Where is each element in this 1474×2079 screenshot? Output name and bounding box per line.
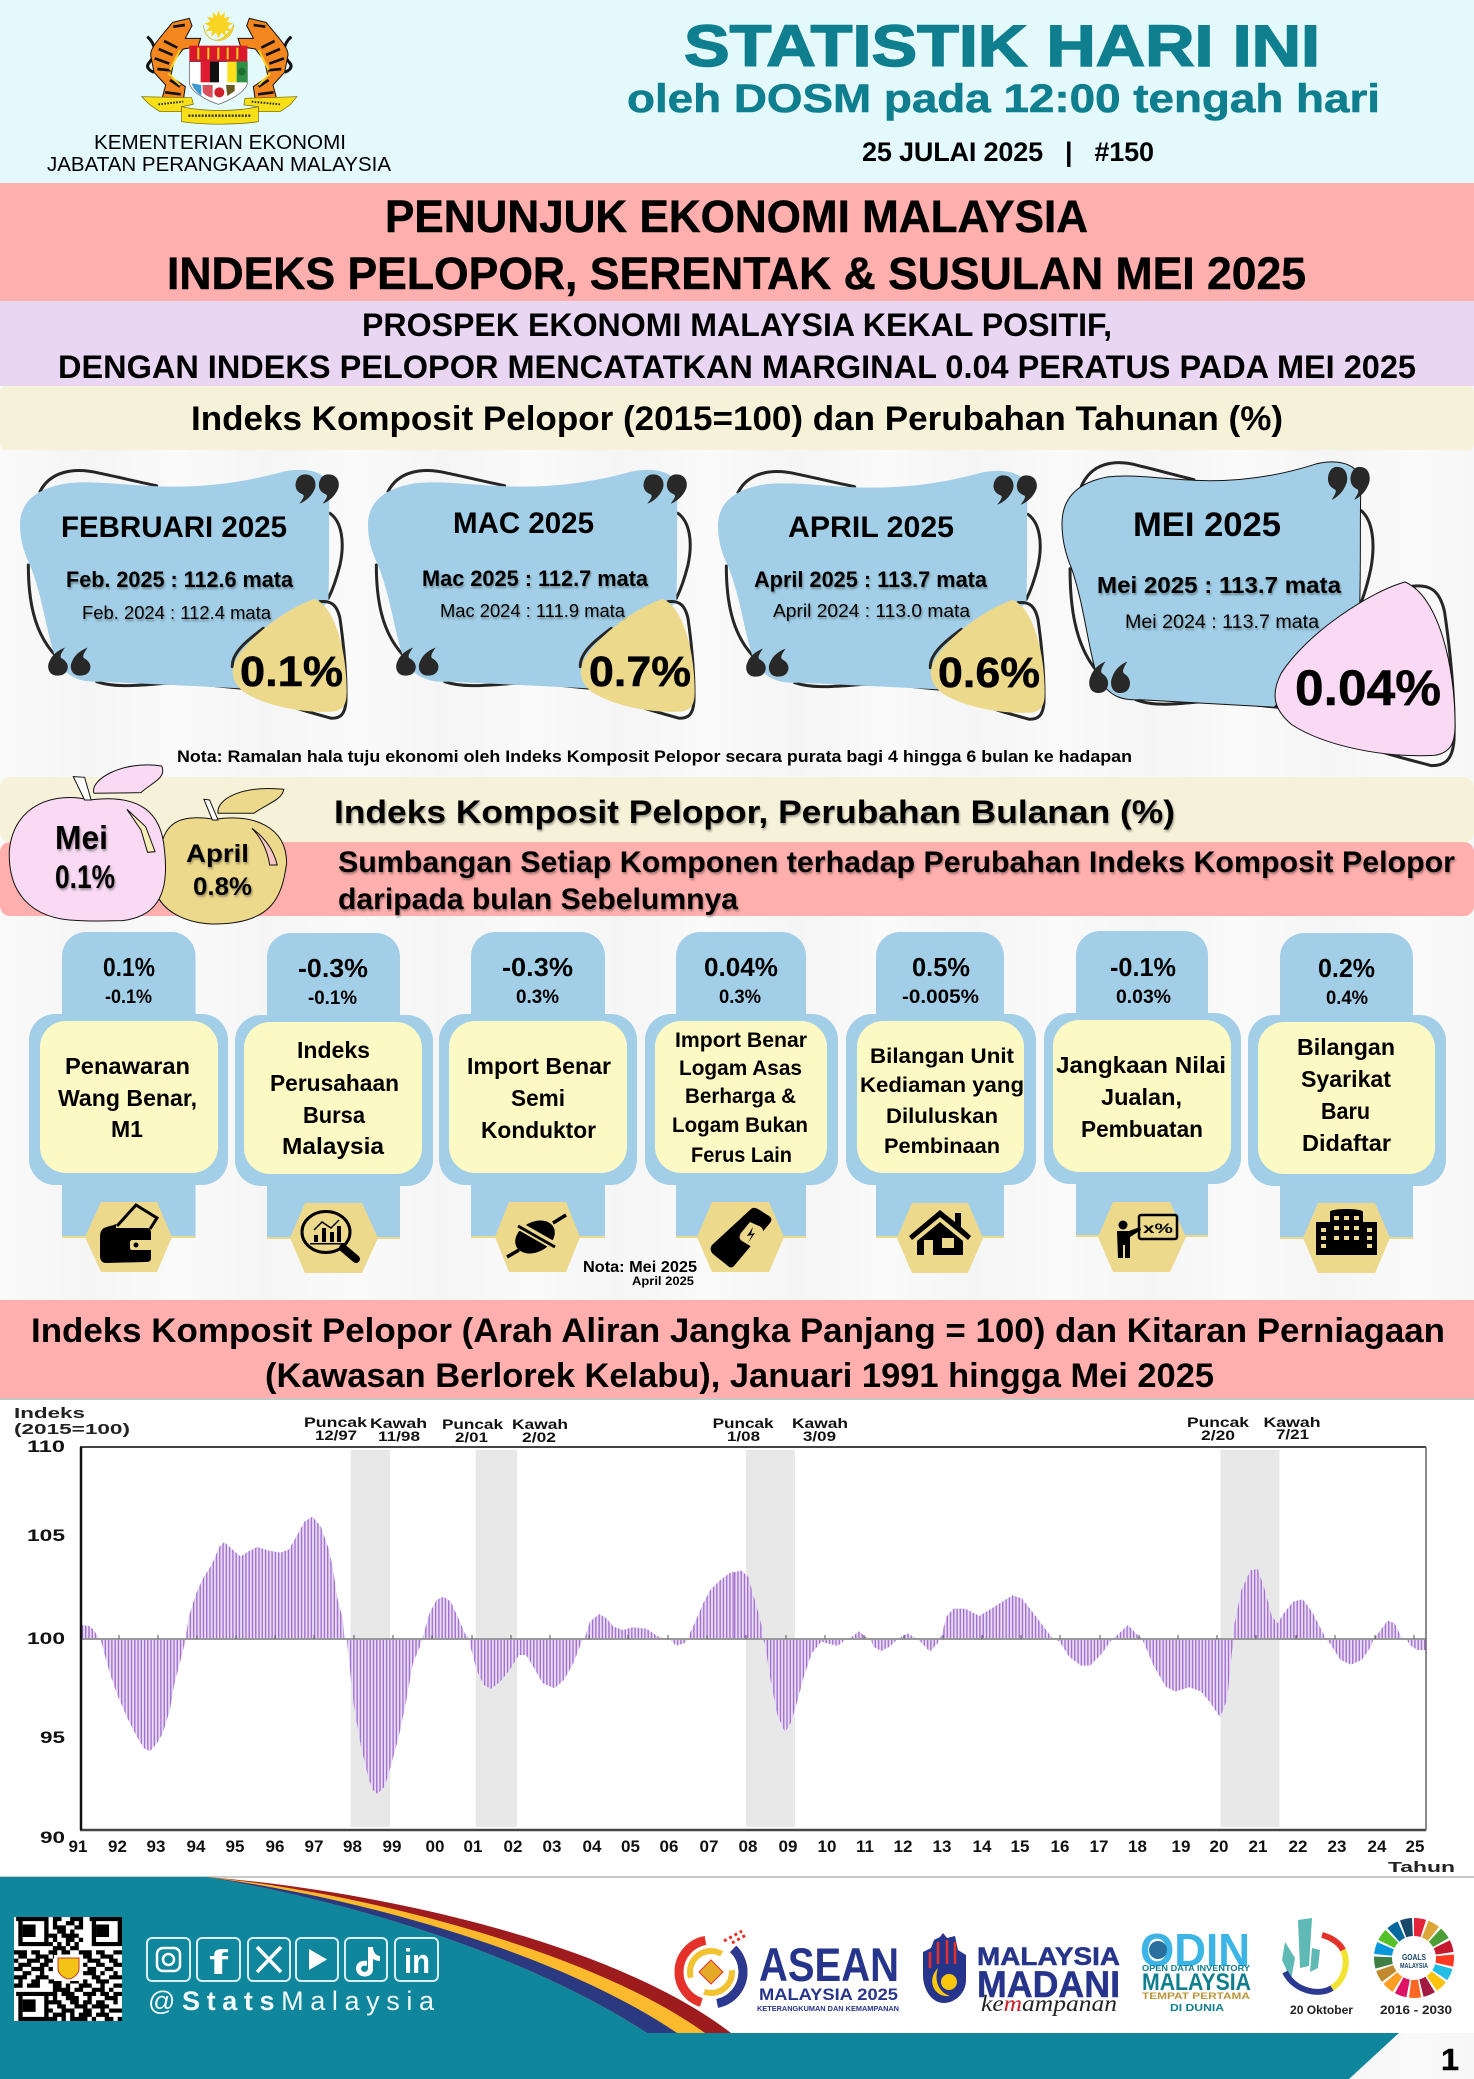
- logo: Malaysia Madani: [923, 1933, 1120, 2016]
- peak and trough labels: 7/21: [1276, 1426, 1309, 1442]
- title: Statistik Hari Ini: STATISTIK HARI INI: [684, 14, 1320, 79]
- panel: component 7 new companies: Didaftar: [1302, 1130, 1391, 1156]
- peak and trough labels: Kawah: [792, 1415, 848, 1431]
- card: April 2025: April 2024 : 113.0 mata: [773, 601, 971, 621]
- panel: key message: [0, 301, 1474, 386]
- logo: SDG wheel: 2016 - 2030: [1380, 2003, 1452, 2017]
- x axis labels: 11: [856, 1837, 874, 1856]
- logo: SDG wheel: MALAYSIA: [1400, 1963, 1428, 1970]
- logo: ASEAN Malaysia 2025: [679, 1931, 899, 2013]
- card: Mei 2025: 0.04%: [1295, 660, 1441, 716]
- x axis labels: 22: [1289, 1837, 1307, 1856]
- icon: Malaysia coat of arms: [142, 10, 297, 124]
- x axis labels: 14: [973, 1837, 992, 1856]
- peak and trough labels: Puncak: [713, 1415, 774, 1431]
- heading: annual change: [0, 386, 1474, 450]
- logo: Malaysia Madani: kemampanan: [981, 1991, 1117, 2016]
- panel: component 1 money supply: Wang Benar,: [58, 1085, 197, 1111]
- logo: ODIN: [1140, 1924, 1251, 2014]
- x axis labels: 02: [504, 1837, 522, 1856]
- logo: ODIN: TEMPAT PERTAMA: [1142, 1991, 1251, 2001]
- panel: month cards shapes and text: [20, 462, 1455, 766]
- logo: World Statistics Day: [1282, 1918, 1353, 2017]
- panel: component 2 stock index: Bursa: [303, 1102, 365, 1128]
- header band: [0, 0, 1474, 183]
- logo: ASEAN Malaysia 2025: MALAYSIA 2025: [759, 1985, 898, 2004]
- x axis labels: 25: [1406, 1837, 1424, 1856]
- panel: component 6 sales expectation: Jangkaan Nilai: [1056, 1052, 1226, 1078]
- peak and trough labels: 3/09: [803, 1428, 836, 1444]
- panel: component 7 new companies: Syarikat: [1301, 1066, 1391, 1092]
- icon: presenter with board: x%: [1143, 1220, 1174, 1236]
- logo: ODIN: DI DUNIA: [1170, 2003, 1224, 2014]
- panel: component 3 semiconductor imports: Semi: [511, 1085, 565, 1111]
- panel: component 1 money supply: 0.1%: [103, 952, 155, 982]
- panel: component 3 semiconductor imports: -0.3%: [502, 952, 573, 982]
- x axis labels: 04: [583, 1837, 602, 1856]
- x axis labels: 99: [383, 1837, 401, 1856]
- x axis labels: 08: [739, 1837, 757, 1856]
- y axis labels: 95: [40, 1728, 65, 1747]
- social handle: @StatsMalaysia: [148, 1986, 435, 2016]
- logo: ASEAN Malaysia 2025: KETERANGKUMAN DAN KEMAMPANAN: [757, 2006, 899, 2013]
- logo: ODIN: ODIN: [1140, 1924, 1250, 1976]
- icon: apple Mei: 0.1%: [55, 859, 115, 895]
- panel: component 5 housing units: [846, 932, 1036, 1273]
- card: Mei 2025: MEI 2025: [1133, 506, 1281, 544]
- x axis labels: 20: [1210, 1837, 1228, 1856]
- y axis labels: 110: [27, 1437, 65, 1456]
- panel: component 1 money supply: M1: [111, 1116, 143, 1142]
- logo: SDG wheel: GOALS: [1402, 1953, 1427, 1962]
- panel: main heading: INDEKS PELOPOR, SERENTAK & SUSULAN MEI 2025: [167, 248, 1306, 299]
- QR code: [14, 1917, 122, 2021]
- logo: SDG wheel: [1380, 1927, 1452, 2017]
- y axis labels: 90: [40, 1828, 65, 1847]
- panel: component 5 housing units: 0.5%: [912, 952, 970, 982]
- peak and trough labels: [304, 1414, 1320, 1445]
- panel: component 6 sales expectation: -0.1%: [1110, 952, 1176, 982]
- card: Februari 2025: 0.1%: [240, 648, 343, 696]
- panel: component 7 new companies: Baru: [1321, 1098, 1370, 1124]
- panel: component 4 metal imports: 0.04%: [704, 952, 778, 982]
- baseline and frame: [80, 1638, 1426, 1640]
- heading: component contribution: [0, 842, 1474, 916]
- icon: wallet: [100, 1205, 157, 1263]
- panel: component 3 semiconductor imports: Import Benar: [467, 1053, 611, 1079]
- card: April 2025: APRIL 2025: [788, 511, 954, 544]
- card: Mac 2025: 0.7%: [589, 648, 691, 696]
- panel: component 4 metal imports: Import Benar: [675, 1029, 807, 1052]
- note: legend May and April: Nota: Mei 2025: [583, 1259, 697, 1276]
- x axis labels: 15: [1011, 1837, 1029, 1856]
- panel: component 6 sales expectation: Pembuatan: [1081, 1116, 1203, 1142]
- card: Mac 2025: Mac 2024 : 111.9 mata: [440, 601, 626, 621]
- panel: component 5 housing units: -0.005%: [902, 987, 979, 1008]
- social icons: [147, 1938, 438, 1981]
- x axis labels: 17: [1090, 1837, 1108, 1856]
- card: Mac 2025: [368, 470, 695, 718]
- shaded recession periods: [351, 1450, 1280, 1827]
- card: April 2025: [718, 471, 1045, 719]
- panel: component 7 new companies: [1248, 933, 1446, 1273]
- y axis labels: 105: [27, 1526, 65, 1545]
- x axis labels: 13: [933, 1837, 951, 1856]
- x axis labels: 92: [108, 1837, 127, 1856]
- x axis labels: 12: [894, 1837, 912, 1856]
- panel: component 2 stock index: -0.3%: [298, 953, 368, 983]
- panel: component 6 sales expectation: 0.03%: [1116, 987, 1171, 1008]
- icon: metal bar: [711, 1208, 771, 1268]
- bars 1991 to 2007: [81, 1517, 734, 1794]
- panel: component 6 sales expectation: [1044, 931, 1241, 1272]
- axis titles: Indeks: [14, 1405, 85, 1422]
- card: Februari 2025: [20, 470, 347, 718]
- panel: component 4 metal imports: Berharga &: [685, 1085, 796, 1108]
- axis titles: (2015=100): [14, 1421, 130, 1438]
- panel: main heading: PENUNJUK EKONOMI MALAYSIA: [385, 191, 1088, 242]
- peak and trough labels: 2/02: [522, 1429, 556, 1445]
- logo: Malaysia Madani: MALAYSIA: [977, 1943, 1120, 1971]
- heading: long-term chart: Indeks Komposit Pelopor (Arah Aliran Jangka Panjang = 100) dan Kitaran Perniagaan: [31, 1312, 1445, 1350]
- peak and trough labels: 2/20: [1201, 1427, 1235, 1443]
- icon: apple Mei: Mei: [55, 819, 108, 856]
- panel: key message: PROSPEK EKONOMI MALAYSIA KEKAL POSITIF,: [362, 307, 1112, 343]
- x axis labels: 95: [226, 1837, 244, 1856]
- panel: component 7 new companies: 0.4%: [1326, 988, 1368, 1009]
- panel: component 4 metal imports: [645, 932, 838, 1272]
- x axis labels: 98: [343, 1837, 362, 1856]
- note: legend May and April: [583, 1259, 697, 1288]
- icon: apple April: 0.8%: [193, 873, 252, 901]
- x axis labels: [69, 1837, 1424, 1856]
- axis titles: Tahun: [1388, 1859, 1455, 1876]
- x axis labels: 07: [700, 1837, 718, 1856]
- x axis labels: 05: [621, 1837, 640, 1856]
- card: Mac 2025: MAC 2025: [453, 507, 594, 540]
- x axis labels: 93: [147, 1837, 165, 1856]
- panel: component 7 new companies: Bilangan: [1297, 1034, 1395, 1060]
- panel: component 2 stock index: Indeks: [297, 1037, 370, 1063]
- organisation name: JABATAN PERANGKAAN MALAYSIA: [47, 154, 392, 176]
- icon: presenter with board: [1117, 1215, 1177, 1258]
- peak and trough labels: Puncak: [442, 1416, 503, 1432]
- date and issue: 25 JULAI 2025 | #150: [862, 137, 1154, 167]
- heading: monthly change: [0, 777, 1474, 842]
- social glyphs: [209, 1943, 430, 1982]
- x axis labels: 19: [1172, 1837, 1190, 1856]
- peak and trough labels: 11/98: [378, 1428, 420, 1444]
- subtitle: oleh DOSM pada 12:00 tengah hari: [627, 77, 1380, 121]
- heading: monthly change: Indeks Komposit Pelopor, Perubahan Bulanan (%): [334, 794, 1175, 830]
- heading: long-term chart: [0, 1300, 1474, 1400]
- bars 2008 to 2025: [734, 1569, 1426, 1732]
- panel: component 5 housing units: Kediaman yang: [860, 1074, 1024, 1097]
- icon: apple Mei: [9, 765, 166, 921]
- card: Mei 2025: Mei 2025 : 113.7 mata: [1097, 572, 1341, 598]
- x axis labels: 16: [1051, 1837, 1069, 1856]
- x axis labels: 23: [1328, 1837, 1346, 1856]
- x axis labels: 18: [1128, 1837, 1147, 1856]
- x axis labels: 09: [779, 1837, 797, 1856]
- panel: key message: DENGAN INDEKS PELOPOR MENCATATKAN MARGINAL 0.04 PERATUS PADA MEI 2025: [58, 349, 1416, 385]
- peak and trough labels: 2/01: [455, 1429, 488, 1445]
- note: forecast: Nota: Ramalan hala tuju ekonomi oleh Indeks Komposit Pelopor secara purata bagi 4 hingga 6 bulan ke hadapan: [177, 747, 1132, 766]
- icon: apple April: [153, 789, 287, 924]
- heading: annual change: Indeks Komposit Pelopor (2015=100) dan Perubahan Tahunan (%): [191, 400, 1283, 438]
- chart: composite leading index bars: [0, 1400, 1474, 1878]
- panel: component 6 sales expectation: Jualan,: [1101, 1084, 1182, 1110]
- social glyphs: f: [209, 1944, 229, 1982]
- x axis labels: 21: [1249, 1837, 1267, 1856]
- panel: component 2 stock index: [235, 933, 433, 1273]
- panel: component 7 new companies: 0.2%: [1318, 953, 1375, 983]
- card: Februari 2025: FEBRUARI 2025: [61, 511, 287, 544]
- card: Mac 2025: Mac 2025 : 112.7 mata: [422, 566, 649, 591]
- heading: long-term chart: (Kawasan Berlorek Kelabu), Januari 1991 hingga Mei 2025: [265, 1357, 1214, 1395]
- panel: component 5 housing units: Diluluskan: [886, 1105, 998, 1128]
- footer: [0, 1877, 1474, 2079]
- panel: component 2 stock index: Malaysia: [282, 1133, 384, 1159]
- x axis labels: 01: [464, 1837, 482, 1856]
- panel: component 4 metal imports: Ferus Lain: [691, 1144, 792, 1167]
- organisation name: [47, 132, 392, 176]
- card: April 2025: April 2025 : 113.7 mata: [754, 567, 988, 592]
- x axis labels: 96: [266, 1837, 284, 1856]
- peak and trough labels: Puncak: [1187, 1414, 1249, 1430]
- page number: 1: [1441, 2042, 1459, 2077]
- icon: apple April: April: [186, 840, 249, 868]
- card: Mei 2025: Mei 2024 : 113.7 mata: [1125, 612, 1319, 633]
- x axis labels: 91: [69, 1837, 87, 1856]
- peak and trough labels: Kawah: [1264, 1414, 1320, 1430]
- panel: component 3 semiconductor imports: [439, 932, 637, 1272]
- logo: ASEAN Malaysia 2025: ASEAN: [759, 1938, 899, 1991]
- logo: World Statistics Day: 20 Oktober: [1290, 2003, 1353, 2017]
- panel: component 2 stock index: -0.1%: [308, 988, 357, 1009]
- panel: component 3 semiconductor imports: 0.3%: [516, 987, 559, 1008]
- card: Mei 2025: [1062, 462, 1455, 766]
- panel: component 4 metal imports: Logam Bukan: [672, 1114, 808, 1137]
- panel: component 4 metal imports: 0.3%: [719, 987, 761, 1008]
- card: Februari 2025: Feb. 2025 : 112.6 mata: [66, 567, 294, 592]
- panel: component 1 money supply: Penawaran: [65, 1053, 190, 1079]
- peak and trough labels: Puncak: [304, 1414, 367, 1430]
- heading: component contribution: Sumbangan Setiap Komponen terhadap Perubahan Indeks Komposit Pelopor: [338, 846, 1455, 879]
- panel: component 4 metal imports: Logam Asas: [679, 1057, 802, 1080]
- panel: component 3 semiconductor imports: Konduktor: [481, 1117, 596, 1143]
- social glyphs: in: [404, 1943, 430, 1981]
- peak and trough labels: Kawah: [512, 1416, 568, 1432]
- x axis labels: 06: [660, 1837, 678, 1856]
- logo: ODIN: OPEN DATA INVENTORY: [1142, 1964, 1251, 1973]
- axis titles: [14, 1405, 1455, 1876]
- icon: magnifier chart: [302, 1212, 356, 1259]
- x axis labels: 97: [305, 1837, 323, 1856]
- icon: office building: [1316, 1209, 1377, 1255]
- panel: component 1 money supply: -0.1%: [105, 987, 152, 1008]
- x axis labels: 24: [1368, 1837, 1387, 1856]
- y axis labels: 100: [27, 1629, 65, 1648]
- y axis labels: [27, 1437, 65, 1847]
- card: Februari 2025: Feb. 2024 : 112.4 mata: [82, 603, 272, 623]
- card: April 2025: 0.6%: [938, 649, 1040, 697]
- panel: component 1 money supply: [29, 932, 228, 1272]
- panel: component 5 housing units: Pembinaan: [884, 1135, 1000, 1158]
- x axis labels: 94: [187, 1837, 206, 1856]
- icon: crossed plug: [507, 1214, 566, 1260]
- organisation name: KEMENTERIAN EKONOMI: [94, 132, 346, 154]
- note: legend May and April: April 2025: [632, 1274, 694, 1288]
- heading: component contribution: daripada bulan Sebelumnya: [338, 883, 738, 916]
- logo: Malaysia Madani: MADANI: [977, 1964, 1120, 2005]
- x axis labels: 10: [818, 1837, 836, 1856]
- x axis labels: 03: [543, 1837, 561, 1856]
- x axis labels: 00: [426, 1837, 444, 1856]
- panel: main heading: [0, 183, 1474, 301]
- logo: ODIN: MALAYSIA: [1142, 1969, 1251, 1996]
- peak and trough labels: 1/08: [727, 1428, 760, 1444]
- peak and trough labels: Kawah: [370, 1415, 427, 1431]
- icon: house: [909, 1210, 971, 1255]
- peak and trough labels: 12/97: [315, 1427, 357, 1443]
- panel: component 2 stock index: Perusahaan: [270, 1070, 399, 1096]
- panel: component 5 housing units: Bilangan Unit: [870, 1045, 1014, 1068]
